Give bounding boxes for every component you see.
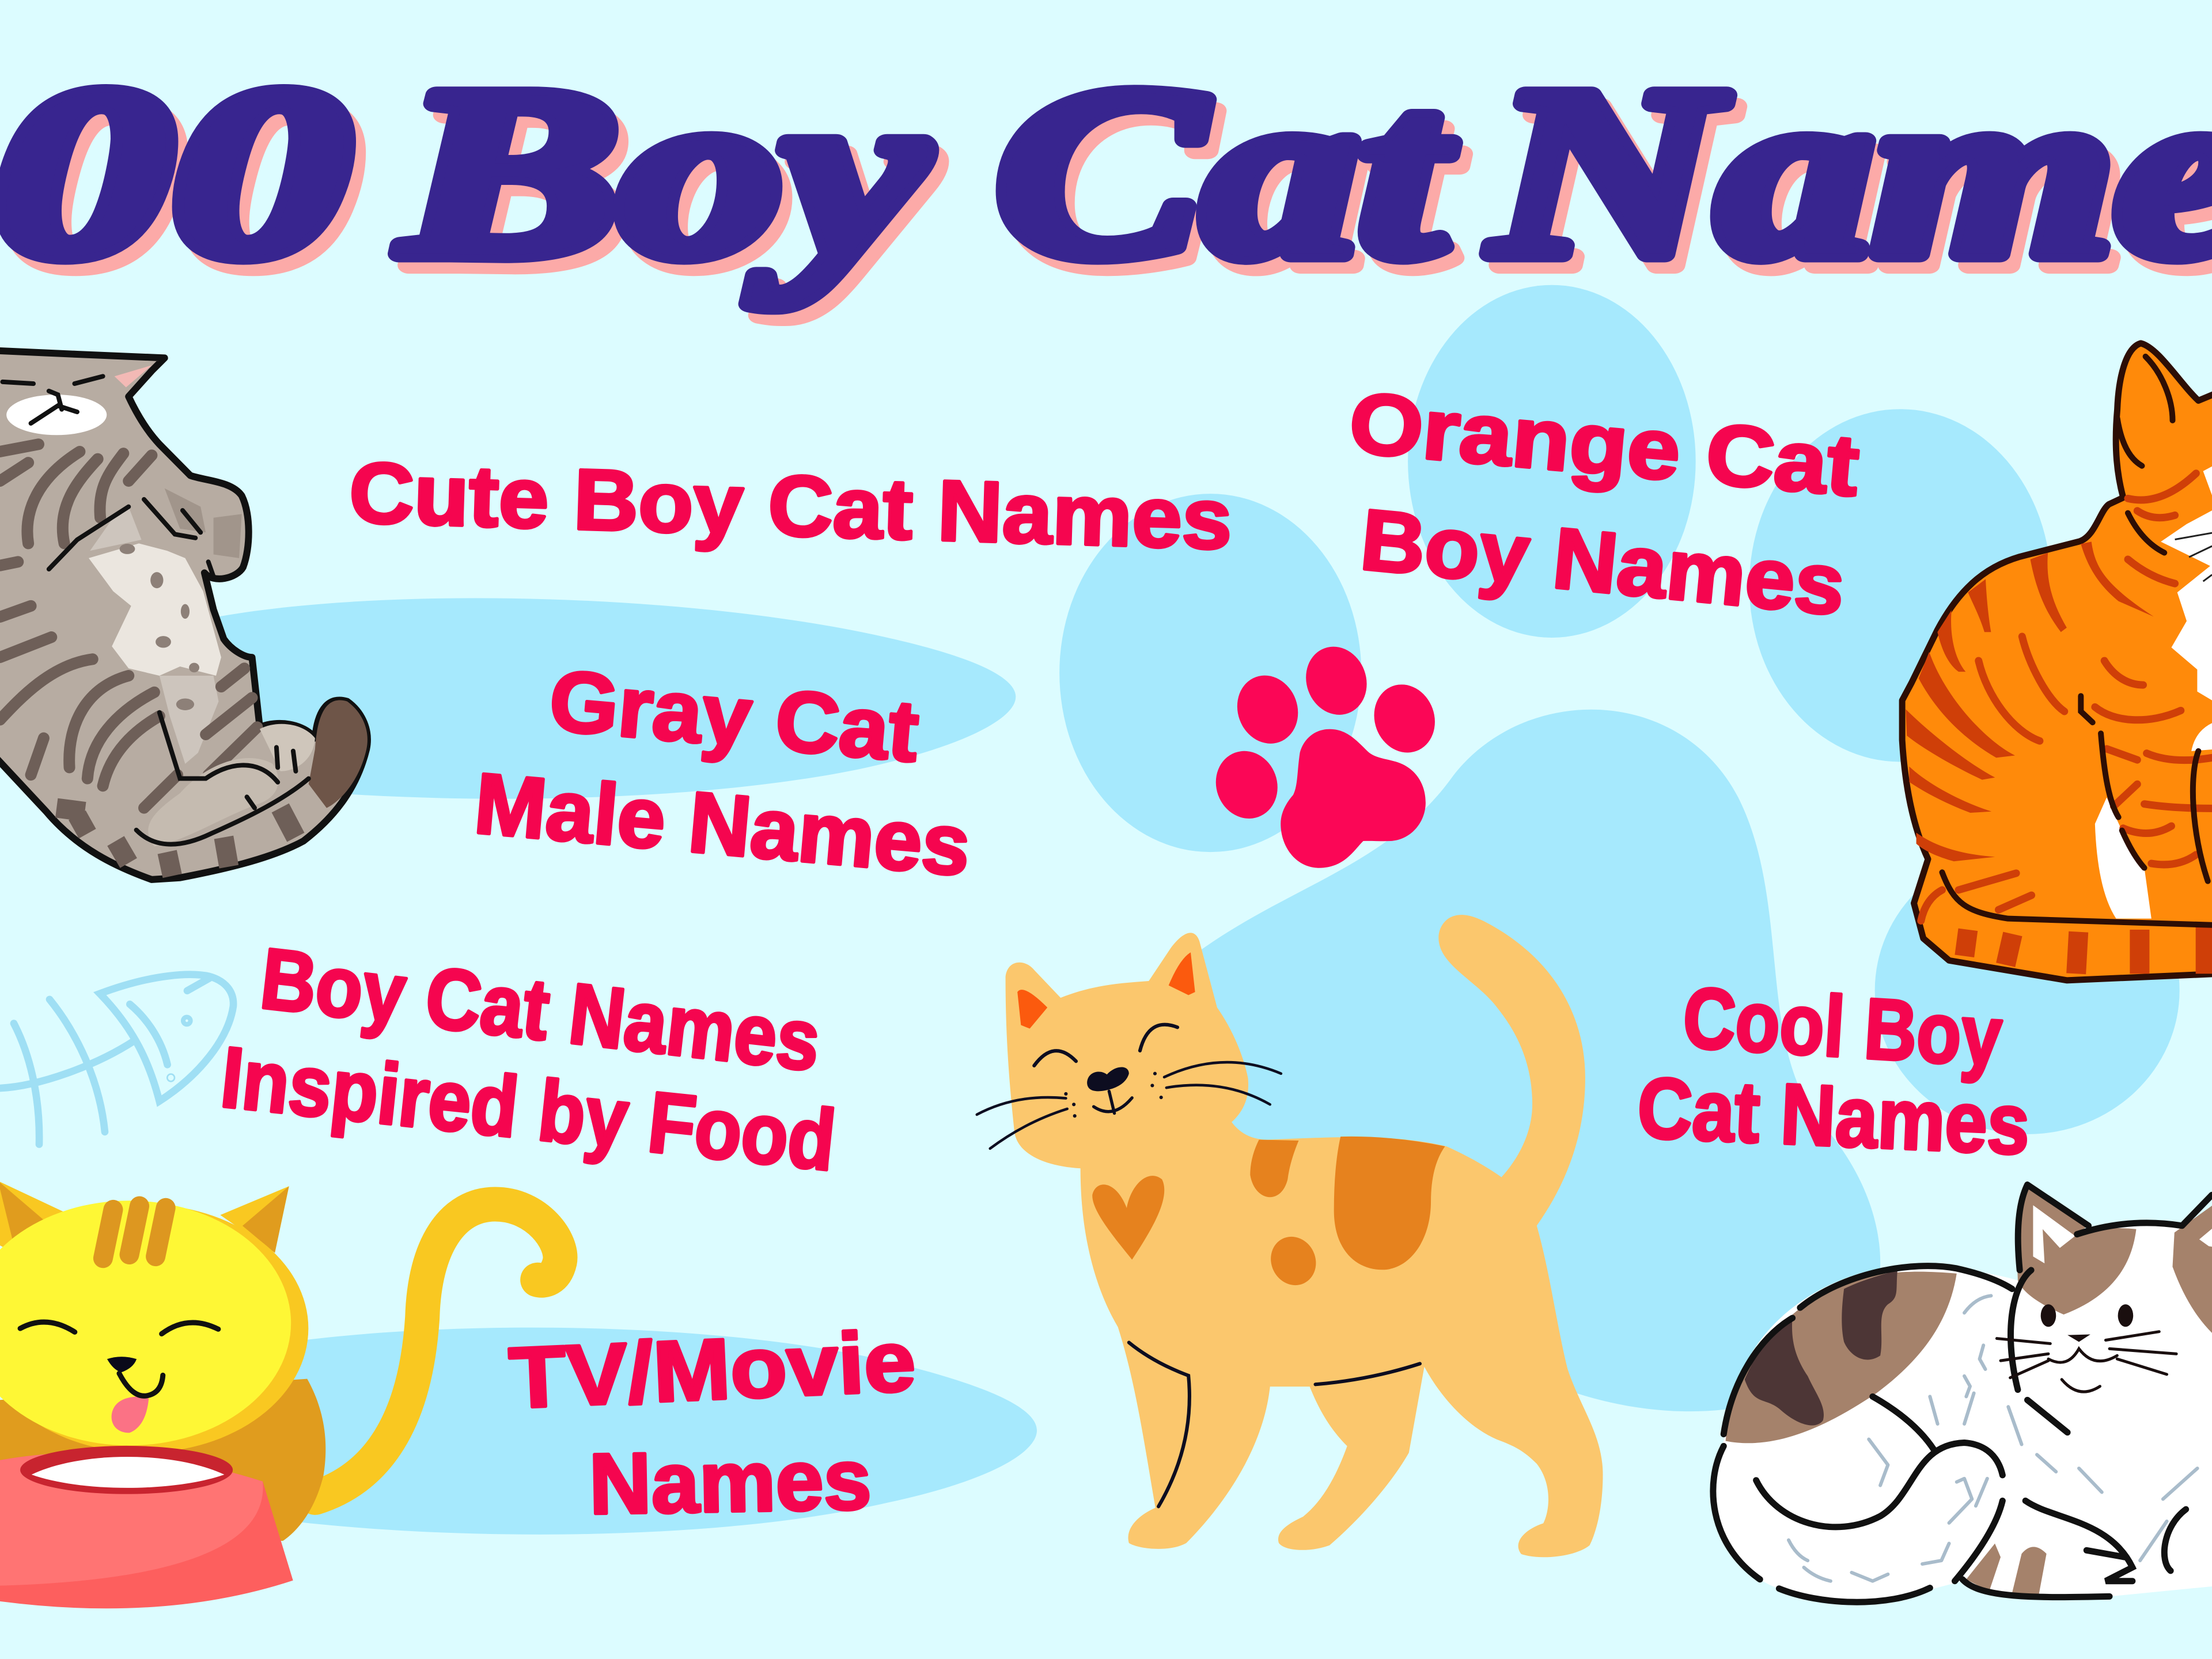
label: TV/Movie Names: Names bbox=[588, 1431, 872, 1532]
title bbox=[0, 39, 2212, 319]
label: TV/Movie Names bbox=[507, 1312, 918, 1532]
whiskers bbox=[2175, 533, 2212, 581]
cat body bbox=[1006, 915, 1603, 1557]
muzzle bbox=[6, 395, 107, 435]
title: Names bbox=[1488, 39, 2212, 307]
back patch bbox=[1726, 1272, 1957, 1443]
smiling peach cat bbox=[977, 915, 1603, 1557]
stripes bbox=[1906, 541, 2154, 861]
ears bbox=[0, 1181, 67, 1255]
ears bbox=[1017, 990, 1047, 1029]
cat body bbox=[1902, 343, 2212, 980]
belly patch bbox=[89, 543, 221, 676]
body bbox=[0, 1379, 325, 1544]
bowl bbox=[0, 1453, 293, 1608]
face bbox=[20, 1322, 218, 1334]
coat patches bbox=[1250, 1140, 1298, 1197]
label: Orange Cat Boy Names: Orange Cat bbox=[1346, 374, 1863, 514]
hind paw bbox=[260, 724, 315, 771]
fur marks bbox=[1789, 1296, 2198, 1581]
title: Boy bbox=[397, 39, 930, 307]
orange tabby cat bbox=[1902, 343, 2212, 980]
head bbox=[0, 1205, 308, 1453]
belly spots bbox=[120, 544, 199, 710]
black ink lines bbox=[1942, 357, 2212, 925]
label: Gray Cat Male Names: Gray Cat bbox=[546, 652, 922, 780]
gray tabby cat bbox=[0, 351, 368, 880]
cat body bbox=[1713, 1183, 2212, 1600]
label: Boy Cat Names Inspired by Food: Inspired by Food bbox=[217, 1029, 840, 1189]
face and leg outlines bbox=[2, 376, 309, 844]
icon: red paw print bbox=[1206, 638, 1444, 868]
title: Cat bbox=[996, 39, 1455, 307]
heart bbox=[1092, 1176, 1164, 1260]
label: Cool Boy Cat Names bbox=[1635, 969, 2032, 1173]
forehead stripes bbox=[103, 1206, 166, 1258]
tail bbox=[315, 1205, 560, 1498]
label: Cool Boy Cat Names: Cat Names bbox=[1635, 1059, 2032, 1173]
title: Cat bbox=[1006, 50, 1465, 318]
tail tip bbox=[309, 700, 368, 808]
face bbox=[2041, 1304, 2056, 1327]
icon: fish skeleton bbox=[0, 975, 233, 1145]
label: Gray Cat Male Names bbox=[471, 652, 974, 894]
label: Gray Cat Male Names: Male Names bbox=[471, 755, 974, 894]
white chest bbox=[2161, 506, 2212, 705]
title: Boy bbox=[407, 50, 940, 319]
yellow cat drinking milk bbox=[0, 1181, 560, 1608]
label: Orange Cat Boy Names bbox=[1346, 374, 1863, 634]
cat body bbox=[0, 351, 368, 880]
head patches and ears bbox=[2016, 1183, 2136, 1315]
face bbox=[977, 1025, 1420, 1506]
label: Boy Cat Names Inspired by Food: Boy Cat Names bbox=[256, 930, 825, 1089]
label: TV/Movie Names: TV/Movie bbox=[507, 1312, 918, 1426]
label: Orange Cat Boy Names: Boy Names bbox=[1357, 491, 1849, 634]
label: Boy Cat Names Inspired by Food bbox=[217, 930, 840, 1189]
background blobs: ovals and large paw print bbox=[198, 285, 2180, 1535]
title: Names bbox=[1498, 50, 2212, 318]
ink outline bbox=[1713, 1185, 2212, 1602]
tabby stripes bbox=[0, 444, 296, 876]
calico cat bbox=[1713, 1183, 2212, 1602]
label: Cute Boy Cat Names: Cute Boy Cat Names bbox=[348, 444, 1233, 567]
label: Cool Boy Cat Names: Cool Boy bbox=[1680, 969, 2005, 1085]
